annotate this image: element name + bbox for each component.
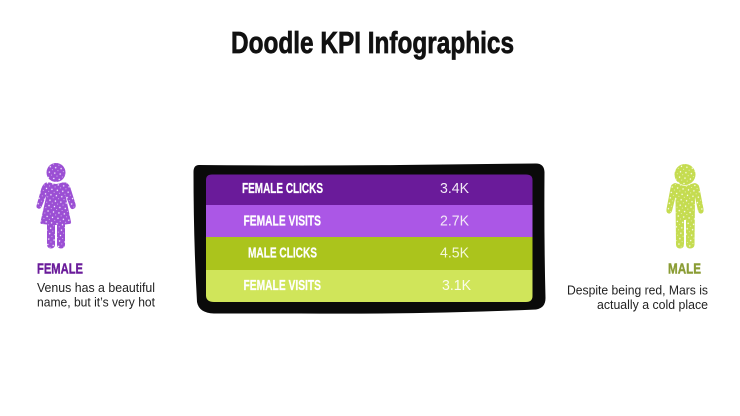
row: female visits [206, 205, 532, 237]
icon: male figure [666, 164, 704, 248]
heading: male: MALE [668, 260, 701, 278]
row: female visits (green) [206, 270, 532, 302]
title: Doodle KPI Infographics [231, 25, 514, 60]
panel: male [567, 164, 708, 312]
heading: female: FEMALE [37, 260, 83, 278]
row: female clicks: 3.4K [440, 180, 469, 197]
text block: male description: actually a cold place [597, 298, 708, 312]
panel: female [36, 163, 155, 310]
text block: male description: Despite being red, Mars is [567, 284, 708, 298]
row: female clicks [206, 174, 532, 205]
row: male clicks [206, 237, 532, 270]
panel: KPI table [194, 164, 546, 314]
row: female visits (green): 3.1K [442, 277, 471, 294]
row: female visits: FEMALE VISITS [244, 213, 321, 230]
row: female clicks: FEMALE CLICKS [242, 180, 323, 197]
row: male clicks: 4.5K [440, 245, 469, 262]
row: male clicks: MALE CLICKS [248, 245, 317, 262]
text block: female description: Venus has a beautiful [37, 281, 155, 295]
doodle frame [194, 164, 546, 314]
icon: female figure [36, 163, 76, 248]
row: female visits: 2.7K [440, 213, 469, 230]
row: female visits (green): FEMALE VISITS [244, 277, 321, 294]
text block: female description: name, but it’s very hot [37, 296, 155, 310]
